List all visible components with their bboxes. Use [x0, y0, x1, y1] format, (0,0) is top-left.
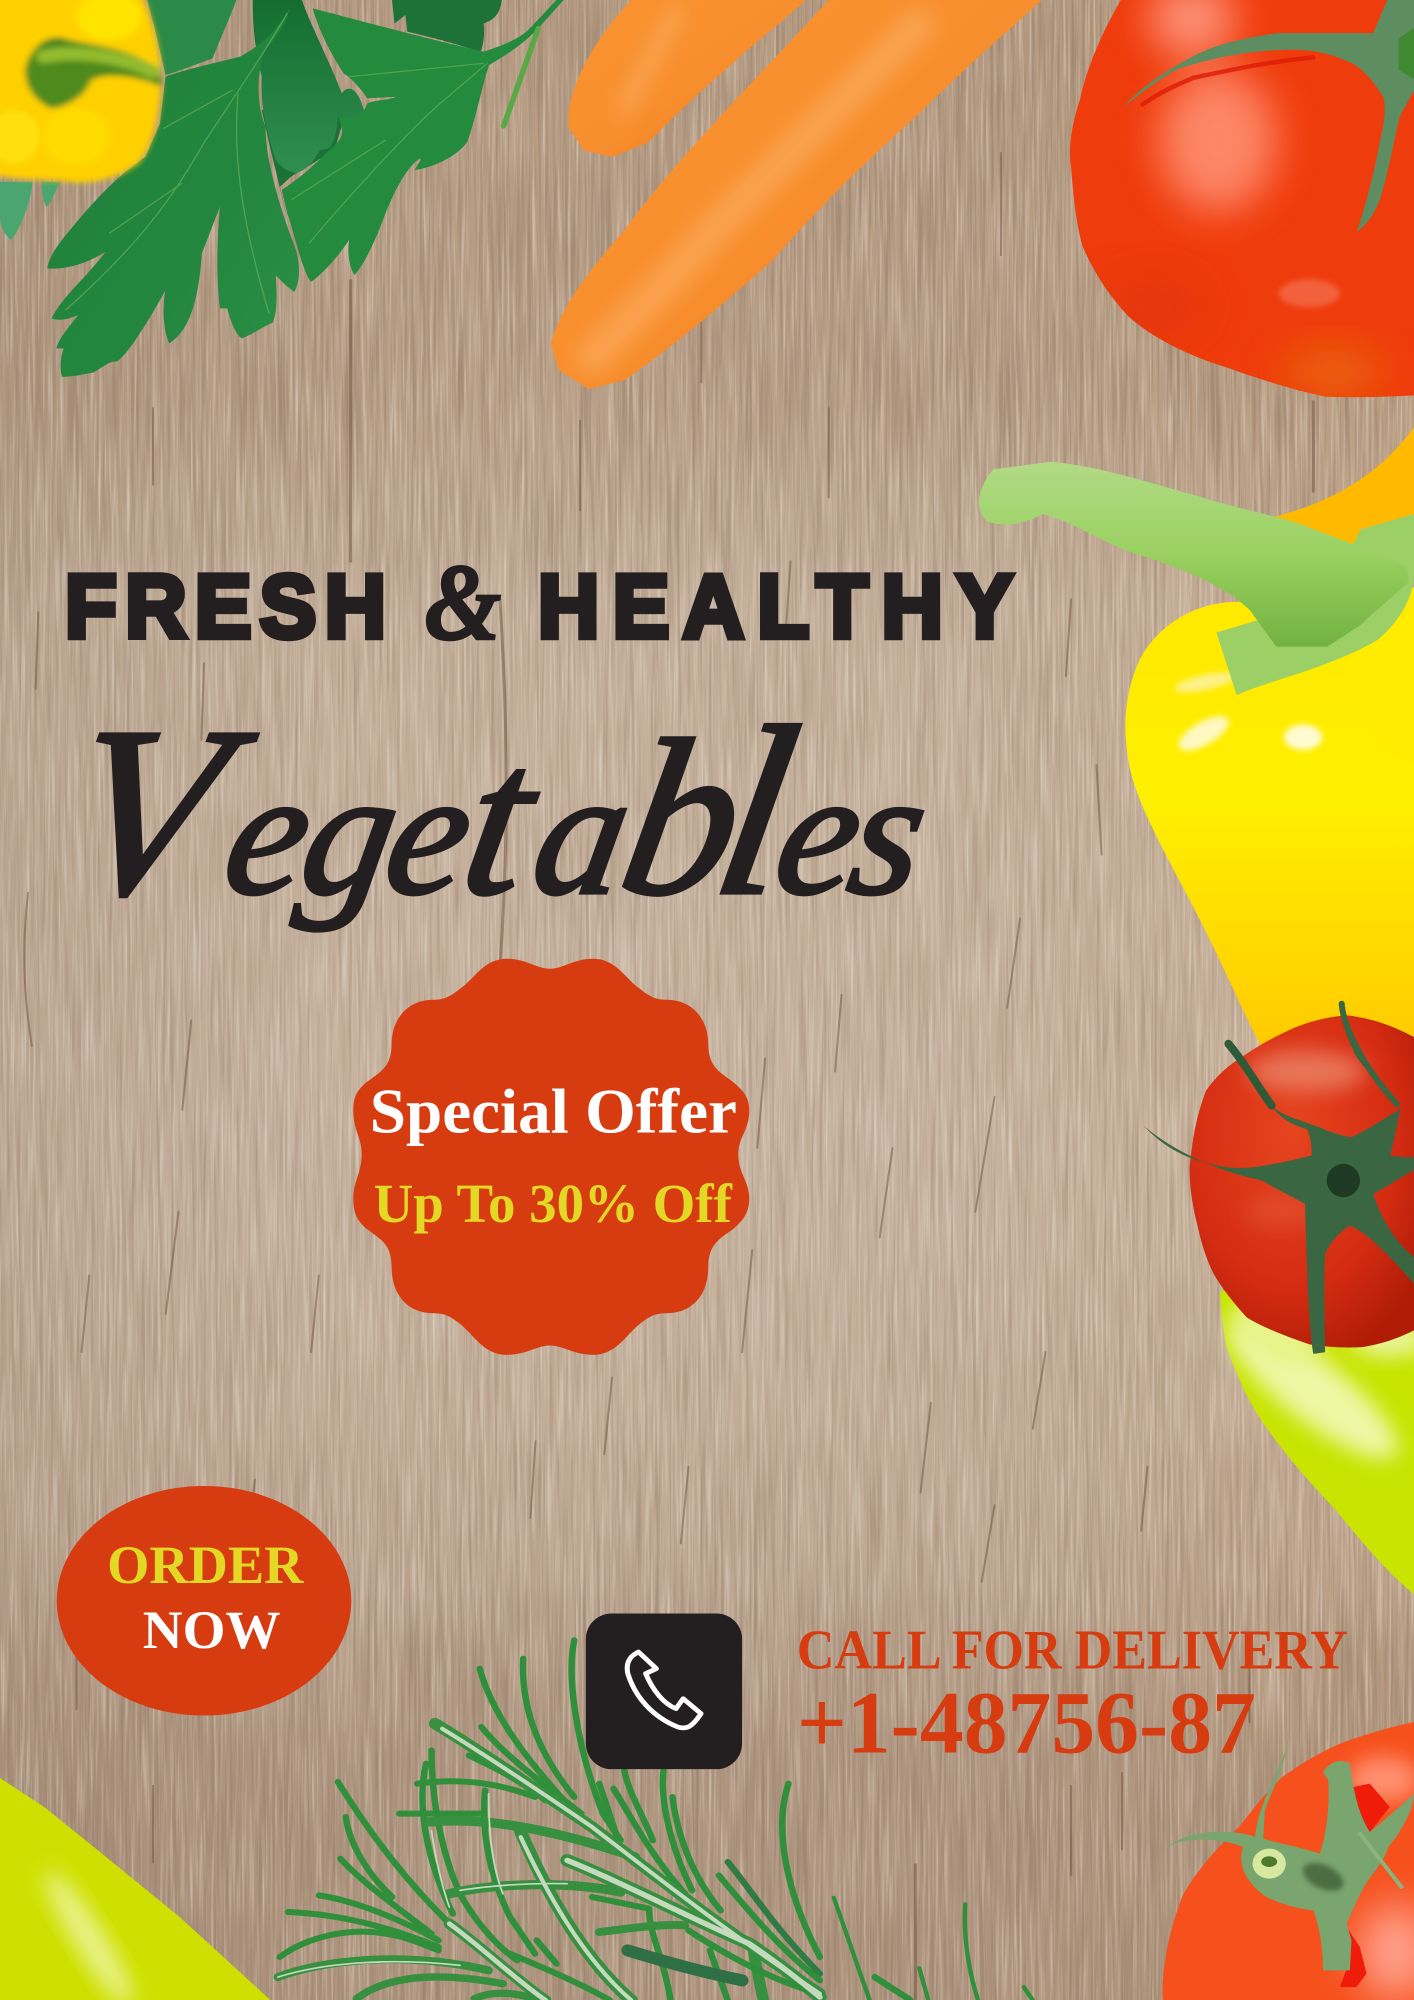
order now button — [57, 1486, 351, 1716]
large carrot — [551, 0, 1042, 389]
small tomato right — [1143, 1002, 1414, 1354]
heading: vegetables: b — [606, 694, 761, 941]
icon: phone — [586, 1614, 742, 1769]
heading: fresh and healthy: FRESH — [65, 557, 386, 657]
heading: vegetables: g — [289, 734, 413, 932]
heading: vegetables: e — [763, 734, 877, 932]
parsley leaves — [0, 0, 564, 377]
heading: vegetables: l — [700, 676, 814, 945]
light green pepper right — [1212, 1276, 1414, 1594]
heading: vegetables: e — [212, 734, 326, 932]
large tomato top right — [1070, 0, 1414, 397]
heading: fresh and healthy: HEALTHY — [538, 557, 1013, 657]
heading: vegetables: s — [837, 734, 941, 932]
order now button: ORDER — [107, 1535, 305, 1595]
special offer badge: Up To 30% Off — [374, 1173, 733, 1234]
small carrot — [568, 0, 806, 157]
special offer badge — [353, 959, 749, 1355]
tomato bottom right — [1162, 1722, 1414, 2000]
special offer badge: Special Offer — [370, 1076, 737, 1147]
rosemary sprig — [278, 1640, 1033, 2000]
yellow pepper right — [979, 427, 1414, 1059]
heading: vegetables: t — [448, 700, 556, 940]
call for delivery text: CALL FOR DELIVERY — [797, 1619, 1348, 1681]
heading: vegetables: V — [49, 676, 268, 945]
call for delivery text: +1-48756-87 — [797, 1674, 1256, 1773]
call for delivery text — [797, 1619, 1348, 1773]
heading: vegetables: a — [521, 734, 645, 932]
order now button: NOW — [143, 1600, 281, 1660]
heading: vegetables: e — [373, 734, 487, 932]
lime pepper bottom left — [0, 1778, 270, 2000]
yellow pepper top left — [0, 0, 162, 183]
heading: fresh and healthy: & — [425, 541, 501, 663]
heading: fresh and healthy — [65, 541, 1013, 663]
